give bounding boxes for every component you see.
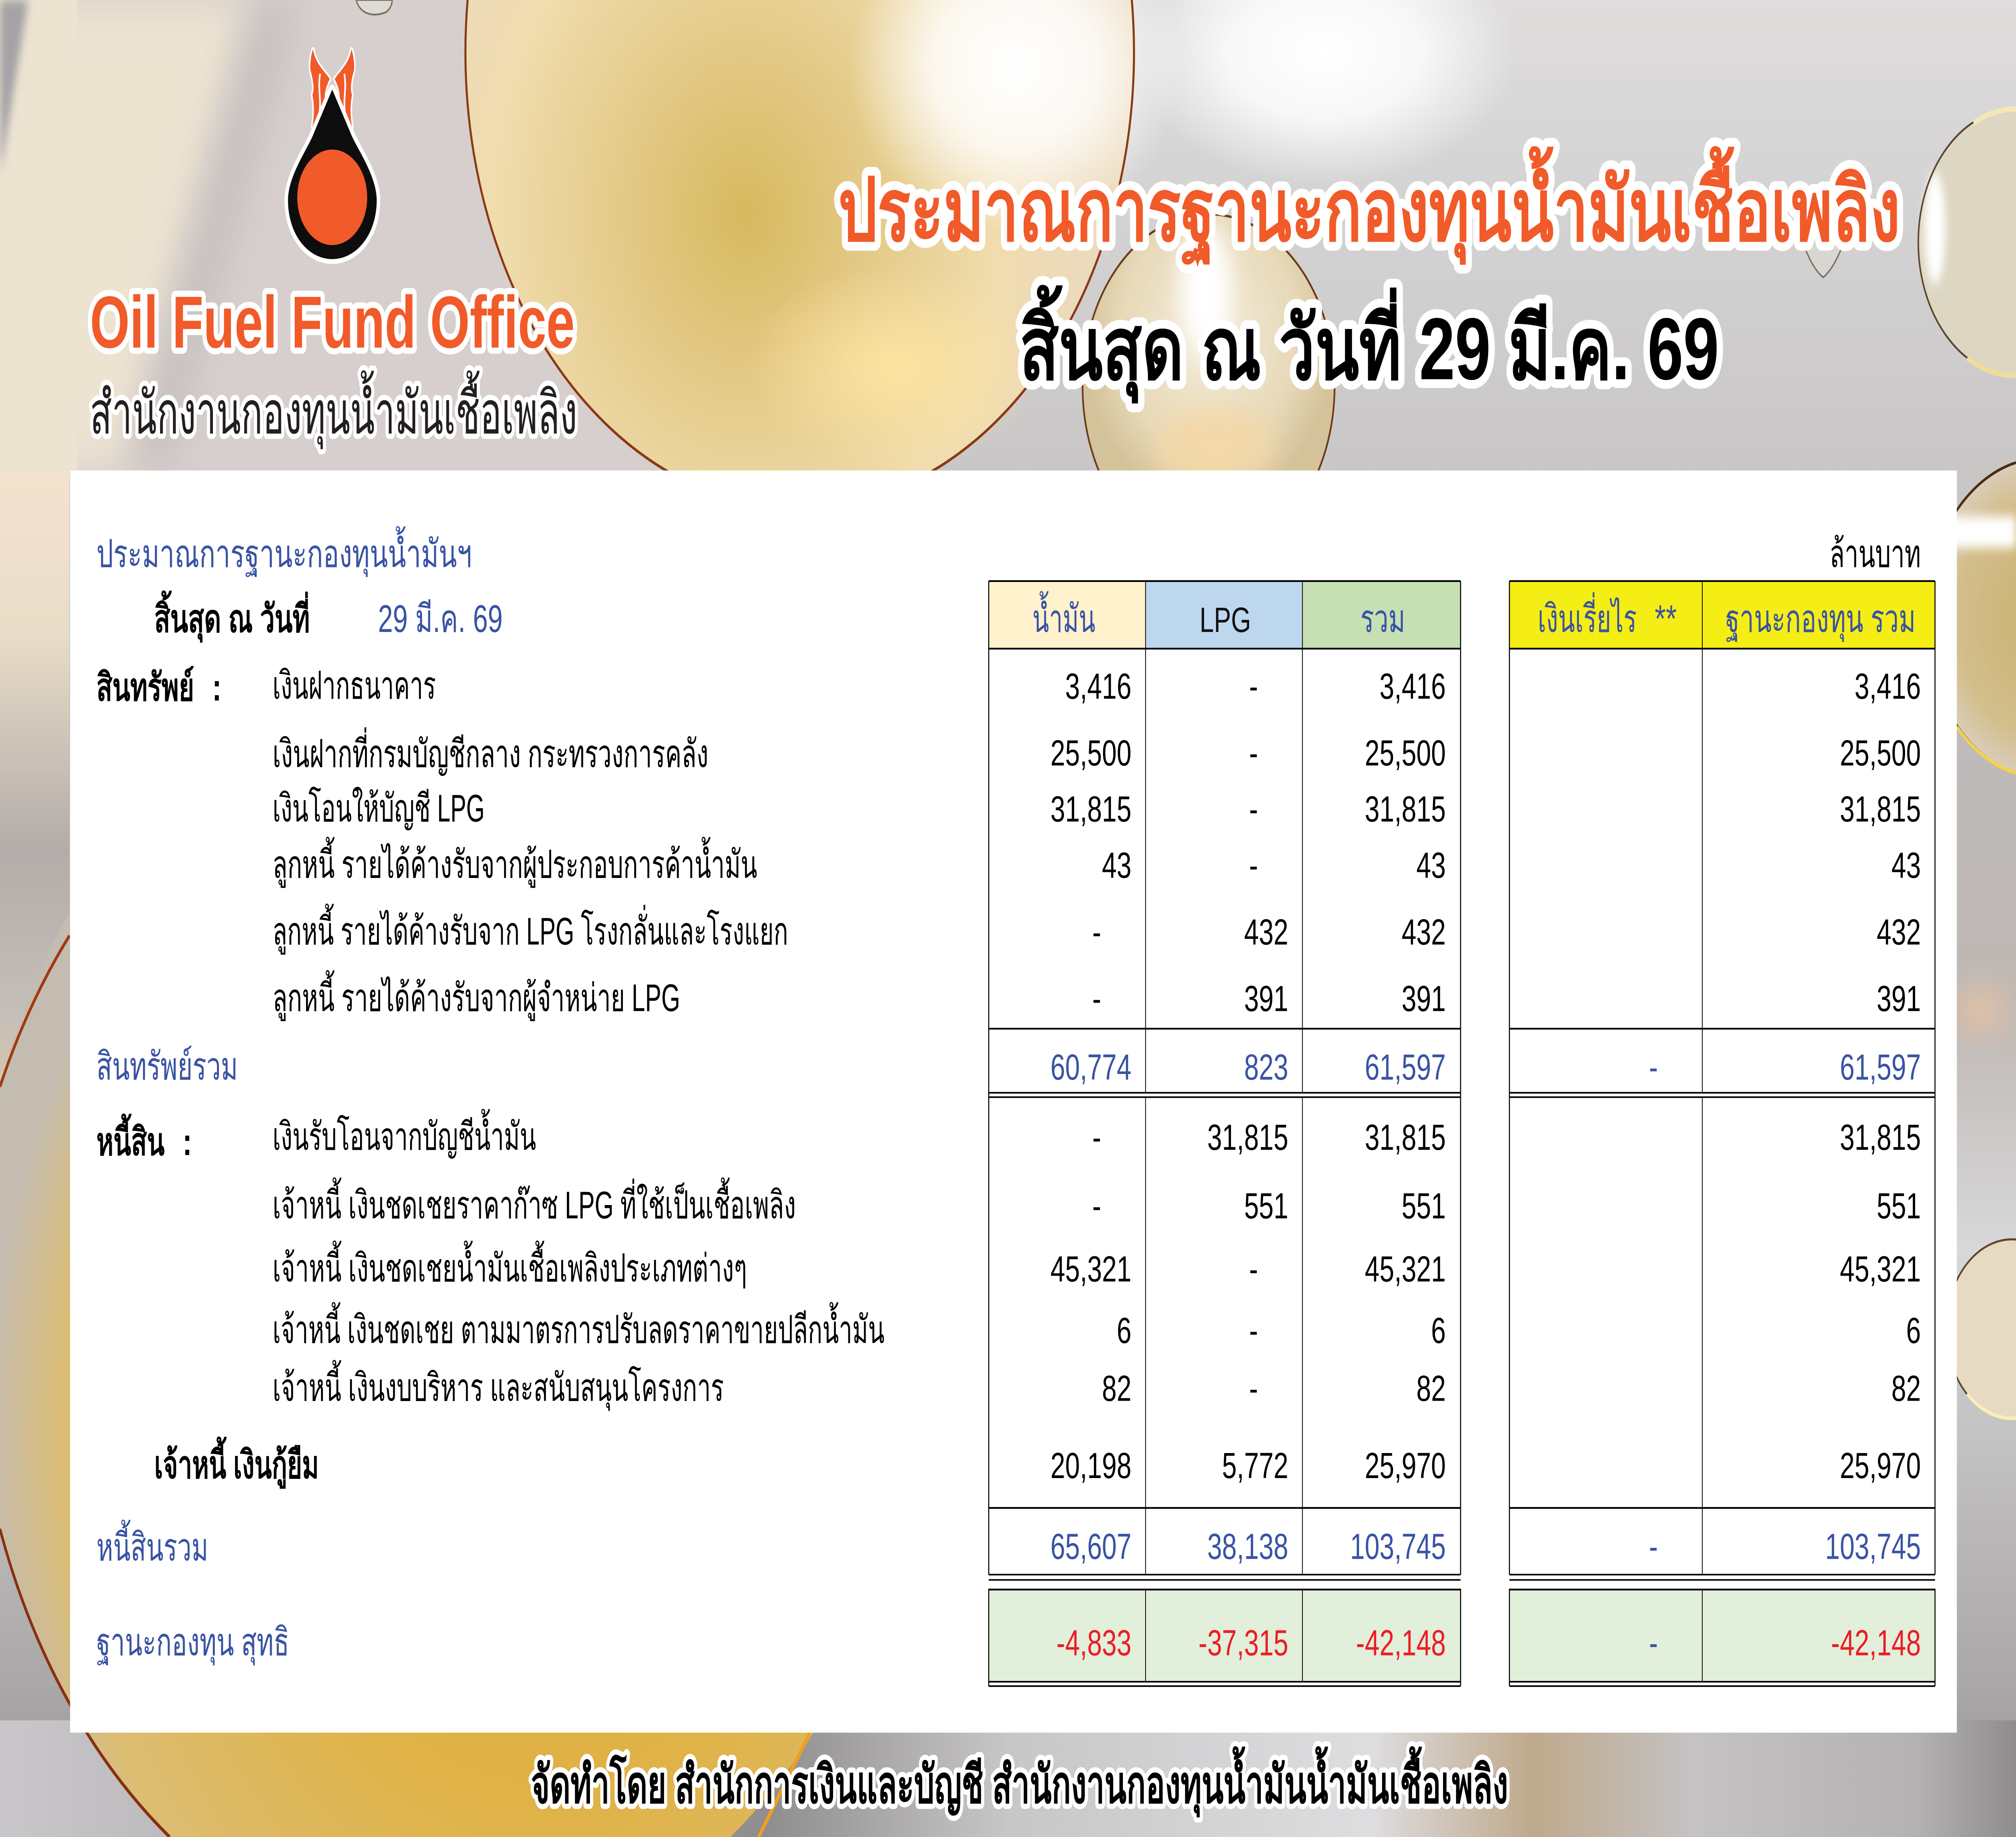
values: oil: 31,815 [1050,789,1131,830]
values: oil: 3,416 [1065,666,1131,707]
values: total: -42,148 [1356,1623,1446,1663]
values: total: 6 [1431,1310,1446,1351]
liabilities labels: เจ้าหนี้ เงินชดเชย ตามมาตรการปรับลดราคาขายปลีกน้ำมัน [273,1302,885,1351]
values: total: 31,815 [1365,789,1446,830]
liabilities labels: เจ้าหนี้ เงินชดเชยน้ำมันเชื้อเพลิงประเภทต่างๆ [273,1241,747,1290]
as-of date [154,590,503,642]
values: LPG: - [1249,733,1258,773]
statement heading: ประมาณการฐานะกองทุนน้ำมันฯ [96,526,472,577]
panel: fund statement [70,471,1957,1733]
values: levy: - [1649,1623,1658,1663]
as-of date: 29 มี.ค. 69 [378,597,503,640]
values: fund total: 6 [1906,1310,1921,1351]
values: LPG: -37,315 [1198,1623,1288,1663]
values: oil: - [1092,978,1101,1019]
values: total: 43 [1416,845,1446,886]
values: fund total: 103,745 [1825,1526,1921,1567]
values: total: 45,321 [1365,1249,1446,1289]
values: total: 61,597 [1365,1047,1446,1087]
values: fund total: 31,815 [1840,789,1921,830]
values: total: 103,745 [1350,1526,1446,1567]
liabilities labels: เงินรับโอนจากบัญชีน้ำมัน [273,1109,536,1159]
values: levy: - [1649,1047,1658,1087]
logo name: Thai: สำนักงานกองทุนน้ำมันเชื้อเพลิง [90,370,577,450]
values: LPG: 31,815 [1207,1117,1288,1157]
values: LPG: - [1249,666,1258,707]
icon: flame and oil drop [288,49,377,259]
values: total: 31,815 [1365,1117,1446,1157]
title: ประมาณการฐานะกองทุนน้ำมันเชื้อเพลิง [838,146,1900,267]
liabilities labels [96,1109,885,1489]
total liabilities label: หนี้สินรวม [96,1520,208,1569]
left labels [96,526,885,1666]
values: total: 25,970 [1365,1445,1446,1486]
values: total: 25,500 [1365,733,1446,773]
values: LPG: 391 [1244,978,1288,1019]
assets labels: ลูกหนี้ รายได้ค้างรับจากผู้ประกอบการค้าน้ำมัน [273,837,757,888]
assets labels: ลูกหนี้ รายได้ค้างรับจาก LPG โรงกลั่นและโรงแยก [273,903,788,955]
assets labels: เงินโอนให้บัญชี LPG [273,786,485,831]
assets labels: ลูกหนี้ รายได้ค้างรับจากผู้จำหน่าย LPG [273,970,680,1021]
as-of date: สิ้นสุด ณ วันที่ [154,590,310,642]
subtitle: date: สิ้นสุด ณ วันที่ 29 มี.ค. 69 [1020,285,1719,404]
values: oil: - [1092,912,1101,952]
values: oil: -4,833 [1056,1623,1131,1663]
values: oil: - [1092,1186,1101,1226]
values: LPG: 823 [1244,1047,1288,1087]
net position label: ฐานะกองทุน สุทธิ [96,1620,289,1666]
values: fund total: -42,148 [1831,1623,1921,1663]
values: fund total: 43 [1891,845,1921,886]
header cells [989,581,1460,648]
droplet: large top [465,0,1183,509]
values: fund total [1825,666,1921,1663]
values: LPG [1198,666,1288,1663]
values: fund total: 551 [1876,1186,1921,1226]
values: oil: 20,198 [1050,1445,1131,1486]
values: oil: 45,321 [1050,1249,1131,1289]
values: total: 3,416 [1379,666,1446,707]
values: fund total: 3,416 [1855,666,1921,707]
values: oil: 6 [1117,1310,1131,1351]
assets labels [96,664,788,1021]
droplet: large bottom [0,655,928,1837]
header cells: เงินเรี่ยไร [1538,592,1637,640]
values: total: 82 [1416,1368,1446,1409]
values: LPG: 38,138 [1207,1526,1288,1567]
header cells: ** [1655,597,1677,640]
values: levy: - [1649,1526,1658,1567]
values: LPG: 551 [1244,1186,1288,1226]
values: fund total: 432 [1876,912,1921,952]
total assets label: สินทรัพย์รวม [96,1045,238,1088]
net position row fill [1510,1589,1935,1682]
values: oil: 65,607 [1050,1526,1131,1567]
unit label: ล้านบาท [1830,532,1921,575]
values: LPG: - [1249,1368,1258,1409]
values: fund total: 82 [1891,1368,1921,1409]
liabilities labels: เจ้าหนี้ เงินงบบริหาร และสนับสนุนโครงการ [273,1360,724,1411]
header: logo [90,49,577,450]
logo name: English: Oil Fuel Fund Office [90,281,575,363]
assets labels: เงินฝากธนาคาร [273,664,436,707]
values: total: 551 [1402,1186,1446,1226]
liabilities labels: เจ้าหนี้ เงินกู้ยืม [154,1436,319,1489]
values: fund total: 45,321 [1840,1249,1921,1289]
values: oil: 82 [1102,1368,1131,1409]
table: levy and fund total [1510,581,1935,1686]
header cells: น้ำมัน [1033,591,1095,640]
liabilities labels: : [183,1120,192,1164]
header cells: รวม [1360,597,1405,640]
footer credit: จัดทำโดย สำนักการเงินและบัญชี สำนักงานกองทุนน้ำมันน้ำมันเชื้อเพลิง [531,1746,1508,1818]
liabilities labels: เจ้าหนี้ เงินชดเชยราคาก๊าซ LPG ที่ใช้เป็นเชื้อเพลิง [273,1177,796,1226]
table: oil, LPG, total [989,581,1460,1686]
values: fund total: 25,970 [1840,1445,1921,1486]
values: LPG: - [1249,845,1258,886]
header cells [1510,581,1935,648]
values: oil: 43 [1102,845,1131,886]
values: oil: - [1092,1117,1101,1157]
assets labels: เงินฝากที่กรมบัญชีกลาง กระทรวงการคลัง [273,727,708,776]
values: total [1350,666,1446,1663]
values: levy [1649,1047,1658,1663]
droplet: tiny top [356,0,392,15]
values: LPG: - [1249,789,1258,830]
values: total: 391 [1402,978,1446,1019]
liabilities labels: หนี้สิน [96,1113,165,1164]
values: fund total: 391 [1876,978,1921,1019]
assets labels: สินทรัพย์ [96,665,194,709]
droplet: lower right [1946,1239,2016,1418]
table rules [989,581,1460,1686]
values: oil [1050,666,1131,1663]
values: oil: 60,774 [1050,1047,1131,1087]
values: LPG: 5,772 [1222,1445,1288,1486]
values: total: 432 [1402,912,1446,952]
droplet: top right [1918,109,2016,376]
values: fund total: 31,815 [1840,1117,1921,1157]
values: oil: 25,500 [1050,733,1131,773]
values: LPG: 432 [1244,912,1288,952]
values: LPG: - [1249,1249,1258,1289]
header cells: ฐานะกองทุน รวม [1725,597,1916,642]
values: fund total: 25,500 [1840,733,1921,773]
net position row fill [989,1589,1460,1682]
values: LPG: - [1249,1310,1258,1351]
droplet: centre [1083,214,1335,558]
droplet: right [1926,463,2016,773]
table rules [1510,581,1935,1686]
droplet: tiny [1795,197,1854,277]
header cells: LPG [1200,601,1251,640]
values: fund total: 61,597 [1840,1047,1921,1087]
assets labels: : [212,665,222,709]
